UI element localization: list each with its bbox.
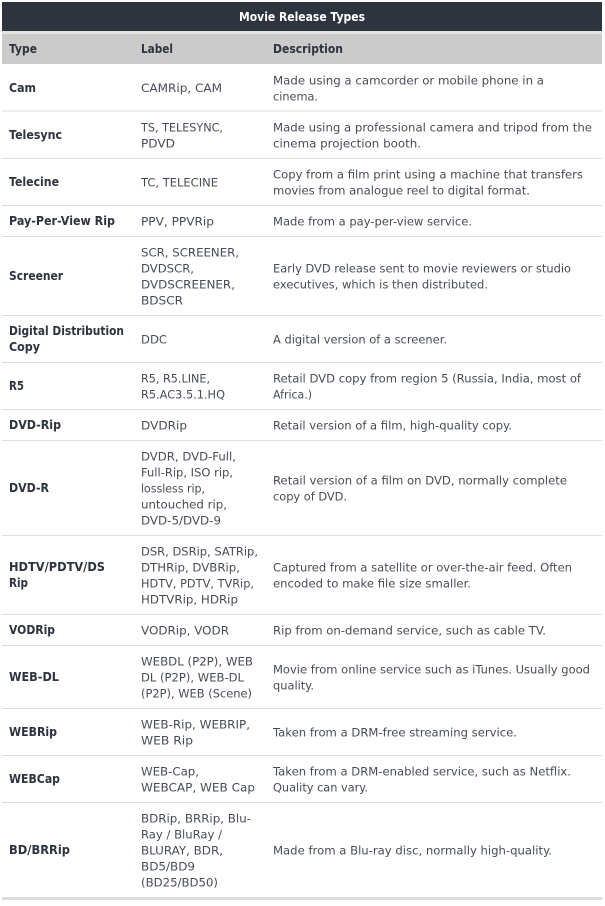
row: HDTV/PDTV/DS Rip: HDTVRip, HDRip: [141, 592, 238, 606]
row: Screener: Screener: [9, 269, 63, 283]
row: Screener: [9, 246, 571, 308]
row: Pay-Per-View Rip: PPV, PPVRip: [141, 214, 214, 228]
row: Telecine: [9, 168, 583, 198]
row: Telesync: Telesync: [9, 128, 62, 142]
row: DVD-R: DVD-5/DVD-9: [141, 514, 221, 528]
row: Screener: Early DVD release sent to movie reviewers or studio: [273, 262, 571, 276]
row: DVD-Rip: [9, 418, 512, 432]
row: DVD-R: lossless rip,: [141, 482, 205, 496]
row: BD/BRRip: (BD25/BD50): [141, 876, 218, 890]
row: HDTV/PDTV/DS Rip: HDTV/PDTV/DS: [9, 560, 105, 574]
row: R5: Retail DVD copy from region 5 (Russia, India, most of: [273, 372, 582, 386]
row: Pay-Per-View Rip: [9, 214, 472, 228]
row: DVD-R: Retail version of a film on DVD, normally complete: [273, 474, 567, 488]
row: Cam: Cam: [9, 81, 36, 95]
row: Telesync: TS, TELESYNC,: [140, 120, 223, 134]
row: BD/BRRip: [9, 812, 552, 890]
row: WEB-DL: quality.: [273, 678, 314, 692]
row: Pay-Per-View Rip: Made from a pay-per-view service.: [273, 214, 472, 228]
row: Digital Distribution Copy: Digital Distribution: [9, 324, 124, 338]
row: Cam: [9, 74, 544, 104]
row: WEBRip: WEBRip: [9, 725, 57, 739]
row: HDTV/PDTV/DS Rip: Rip: [9, 576, 28, 590]
row: Screener: BDSCR: [141, 294, 183, 308]
row: BD/BRRip: BLURAY, BDR,: [141, 844, 223, 858]
row: WEBCap: WEB-Cap,: [141, 764, 199, 778]
row: VODRip: VODRip: [9, 623, 55, 637]
row: Digital Distribution Copy: DDC: [141, 332, 167, 346]
row: Cam: Made using a camcorder or mobile phone in a: [273, 74, 544, 88]
table header row: Label: [141, 42, 173, 56]
row: BD/BRRip: BD/BRRip: [9, 843, 70, 857]
row: HDTV/PDTV/DS Rip: [9, 544, 572, 606]
row: Telesync: PDVD: [141, 136, 175, 150]
row: BD/BRRip: Ray / BluRay /: [141, 828, 222, 842]
row: WEB-DL: DL (P2P), WEB-DL: [141, 670, 245, 684]
row: WEBRip: WEB-Rip, WEBRIP,: [141, 718, 250, 732]
row: Telesync: Made using a professional camera and tripod from the: [273, 120, 592, 134]
row: Telesync: cinema projection booth.: [273, 136, 421, 150]
row: WEBCap: Taken from a DRM-enabled service, such as Netflix.: [272, 764, 571, 778]
row: WEBRip: WEB Rip: [141, 734, 193, 748]
row: HDTV/PDTV/DS Rip: DTHRip, DVBRip,: [141, 560, 240, 574]
row: WEBRip: [9, 718, 517, 748]
row: VODRip: Rip from on-demand service, such as cable TV.: [273, 624, 546, 638]
row: DVD-R: [9, 450, 567, 528]
table header row: [2, 34, 602, 64]
row: Telecine: movies from analogue reel to digital format.: [273, 184, 530, 198]
row: R5: R5: [9, 379, 24, 393]
row: DVD-Rip: Retail version of a film, high-quality copy.: [273, 418, 512, 432]
row: DVD-R: copy of DVD.: [273, 490, 347, 504]
row: DVD-Rip: DVD-Rip: [9, 418, 61, 432]
row: Screener: DVDSCREENER,: [141, 278, 235, 292]
title bar: [2, 2, 602, 34]
row: WEB-DL: WEBDL (P2P), WEB: [141, 654, 253, 668]
title bar: Movie Release Types: [239, 10, 365, 24]
row: WEBCap: Quality can vary.: [273, 780, 368, 794]
row: DVD-R: Full-Rip, ISO rip,: [141, 466, 233, 480]
row: Telecine: TC, TELECINE: [140, 176, 218, 190]
row: Digital Distribution Copy: Copy: [9, 340, 40, 354]
row: WEB-DL: [9, 654, 590, 700]
row: Telecine: Copy from a film print using a machine that transfers: [273, 168, 583, 182]
row: BD/BRRip: BD5/BD9: [141, 860, 195, 874]
row: Screener: SCR, SCREENER,: [141, 246, 239, 260]
row: Telesync: [9, 120, 592, 150]
row: HDTV/PDTV/DS Rip: encoded to make file size smaller.: [273, 576, 471, 590]
row: R5: R5, R5.LINE,: [141, 372, 210, 386]
row: Digital Distribution Copy: [9, 324, 447, 354]
row: WEBCap: [9, 764, 571, 794]
row: R5: [9, 372, 582, 402]
row: Cam: CAMRip, CAM: [141, 81, 222, 95]
row: R5: R5.AC3.5.1.HQ: [141, 388, 225, 402]
row: DVD-R: DVD-R: [9, 481, 49, 495]
row: DVD-R: DVDR, DVD-Full,: [141, 450, 236, 464]
row: HDTV/PDTV/DS Rip: Captured from a satellite or over-the-air feed. Often: [273, 560, 572, 574]
row: R5: Africa.): [273, 388, 312, 402]
row: BD/BRRip: BDRip, BRRip, Blu-: [141, 812, 251, 826]
row: HDTV/PDTV/DS Rip: HDTV, PDTV, TVRip,: [141, 576, 254, 590]
row: WEBCap: WEBCAP, WEB Cap: [141, 780, 255, 794]
row: Digital Distribution Copy: A digital version of a screener.: [273, 332, 447, 346]
row: Screener: executives, which is then distributed.: [273, 278, 488, 292]
row: WEB-DL: Movie from online service such as iTunes. Usually good: [273, 662, 590, 676]
row: Screener: DVDSCR,: [141, 262, 194, 276]
row: Cam: cinema.: [273, 90, 318, 104]
row: WEBCap: WEBCap: [9, 772, 60, 786]
row: DVD-R: untouched rip,: [141, 498, 227, 512]
table header row: Description: [273, 42, 343, 56]
row: Telecine: Telecine: [9, 175, 59, 189]
row: WEB-DL: (P2P), WEB (Scene): [141, 686, 252, 700]
row: VODRip: [9, 623, 546, 638]
row: VODRip: VODRip, VODR: [141, 624, 229, 638]
table header row: Type: [9, 42, 37, 56]
row: HDTV/PDTV/DS Rip: DSR, DSRip, SATRip,: [141, 544, 258, 558]
row: WEBRip: Taken from a DRM-free streaming service.: [272, 726, 517, 740]
row: Pay-Per-View Rip: Pay-Per-View Rip: [9, 214, 115, 228]
row: DVD-Rip: DVDRip: [141, 418, 187, 432]
row: BD/BRRip: Made from a Blu-ray disc, normally high-quality.: [273, 844, 552, 858]
row: WEB-DL: WEB-DL: [9, 670, 59, 684]
